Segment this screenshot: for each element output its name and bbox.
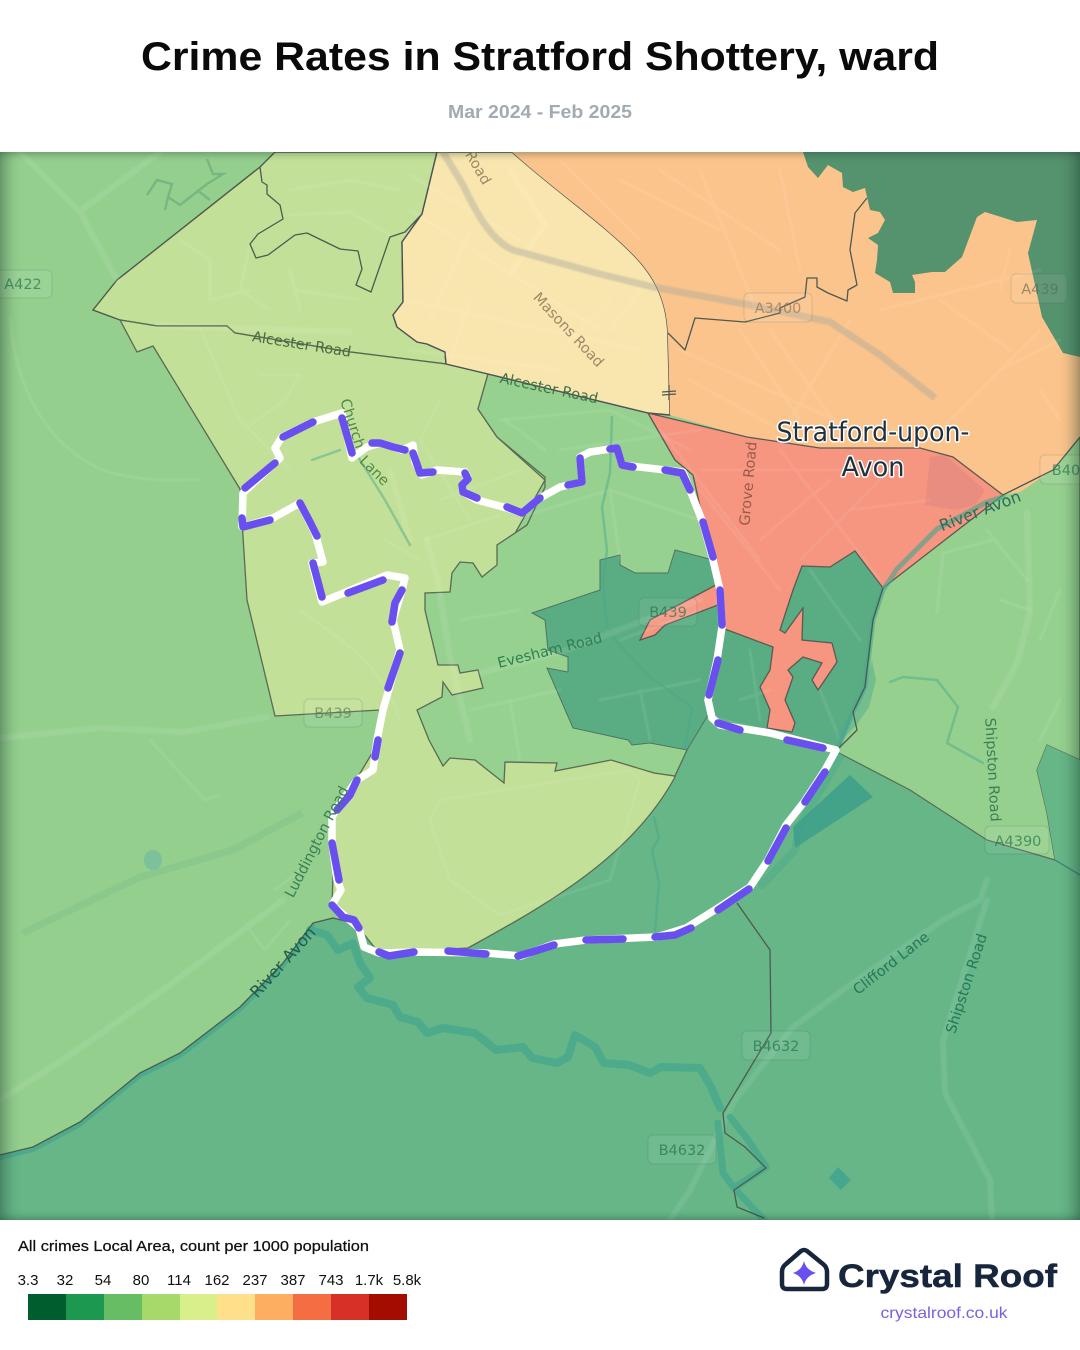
label: Masons Road: Masons Road — [529, 290, 606, 371]
title: Crime Rates in Stratford Shottery, ward — [141, 35, 939, 79]
label: Alcester Road west: Alcester Road — [251, 329, 352, 361]
badge B4632 east — [742, 1031, 810, 1060]
badge A422 — [0, 270, 52, 298]
website url: crystalroof.co.uk — [880, 1305, 1009, 1322]
label: Grove Road: Grove Road — [737, 441, 761, 526]
legend scale numbers: 5.8k — [393, 1272, 422, 1289]
town label: Stratford-upon-Avon: Stratford-upon- — [776, 417, 970, 448]
label: Lane: Lane — [356, 453, 392, 489]
logo wordmark: Crystal Roof — [838, 1258, 1057, 1294]
badge B439 west — [304, 699, 362, 727]
badge B40 — [1040, 455, 1080, 484]
badge B439 east: B439 — [649, 605, 687, 621]
area: north-west yellow green — [93, 152, 446, 364]
area: southern dark green — [0, 715, 1080, 1220]
area: eastern light green — [837, 437, 1080, 860]
badge B4632 south: B4632 — [659, 1143, 705, 1159]
legend scale numbers: 237 — [242, 1272, 268, 1289]
badge B4632 south — [648, 1135, 716, 1164]
logo icon: house with star — [782, 1250, 827, 1289]
legend scale numbers: 54 — [95, 1272, 111, 1289]
header — [141, 35, 939, 122]
town centre shaded block — [925, 455, 985, 510]
area: top right dark green — [803, 152, 1080, 357]
base area: left green — [0, 152, 1080, 1220]
label: Shipston Road south: Shipston Road — [944, 932, 991, 1036]
label: River Avon west: River Avon — [246, 923, 320, 1002]
area: pale yellow — [393, 152, 670, 415]
legend scale numbers: 3.3 — [18, 1272, 38, 1289]
badge A439 — [1011, 274, 1067, 303]
badge B40: B40 — [1052, 463, 1080, 479]
label: Luddington Road: Luddington Road — [282, 784, 352, 900]
badge B439 east — [639, 598, 697, 626]
label: Church: Church — [336, 397, 367, 451]
badge B4632 east: B4632 — [753, 1039, 799, 1055]
darker field strips — [23, 813, 302, 933]
dark small roads north-west — [147, 159, 223, 210]
label: Shipston Road north: Shipston Road — [981, 717, 1003, 822]
label: Evesham Road: Evesham Road — [496, 630, 604, 672]
road name labels — [246, 148, 1024, 1036]
badge A422: A422 — [4, 277, 42, 293]
badge A4390: A4390 — [995, 834, 1041, 850]
ward boundary: Stratford Shottery — [242, 413, 836, 956]
badge B439 west: B439 — [314, 706, 352, 722]
badge A3400 — [744, 293, 812, 322]
boundary lines — [0, 167, 1080, 1218]
label: Clifford Lane: Clifford Lane — [851, 929, 933, 998]
legend scale numbers: 1.7k — [355, 1272, 384, 1289]
badge A3400: A3400 — [755, 301, 801, 317]
road badges — [0, 270, 1080, 1164]
legend scale numbers: 743 — [318, 1272, 344, 1289]
lake — [793, 775, 873, 848]
legend title: All crimes Local Area, count per 1000 population — [18, 1238, 369, 1255]
town label: Stratford-upon-Avon: Avon — [842, 452, 904, 483]
legend scale numbers: 114 — [167, 1272, 191, 1289]
legend scale numbers: 387 — [280, 1272, 306, 1289]
legend colour swatches — [28, 1294, 407, 1320]
faint road network — [0, 152, 1060, 1220]
area: central dark green west block — [532, 550, 722, 750]
legend scale numbers: 162 — [204, 1272, 230, 1289]
area: east darker patch — [1037, 745, 1080, 875]
legend scale numbers — [18, 1272, 422, 1289]
label: Alcester Road east: Alcester Road — [498, 371, 599, 407]
main road A3400 — [443, 152, 935, 398]
area: orange town — [512, 152, 1080, 495]
pond west — [144, 850, 162, 870]
date range subtitle: Mar 2024 - Feb 2025 — [448, 102, 632, 122]
area: salmon town centre — [640, 413, 1003, 732]
area: Evesham Road mid green — [417, 374, 720, 783]
label: River Avon east: River Avon — [937, 487, 1024, 535]
town label: Stratford-upon-Avon — [776, 417, 970, 483]
legend scale numbers: 80 — [133, 1272, 149, 1289]
map edge vignette — [0, 152, 1080, 1220]
badge A439: A439 — [1021, 282, 1059, 298]
river Avon — [0, 417, 1003, 1220]
badge A4390 — [985, 826, 1049, 854]
area: ward yellow green — [120, 320, 675, 953]
wide river reach — [837, 660, 876, 743]
footer — [18, 1238, 1058, 1322]
legend scale numbers: 32 — [57, 1272, 73, 1289]
area: central dark green east block — [708, 551, 883, 752]
choropleth map — [0, 152, 1080, 1220]
small lake south-east — [829, 1167, 851, 1190]
